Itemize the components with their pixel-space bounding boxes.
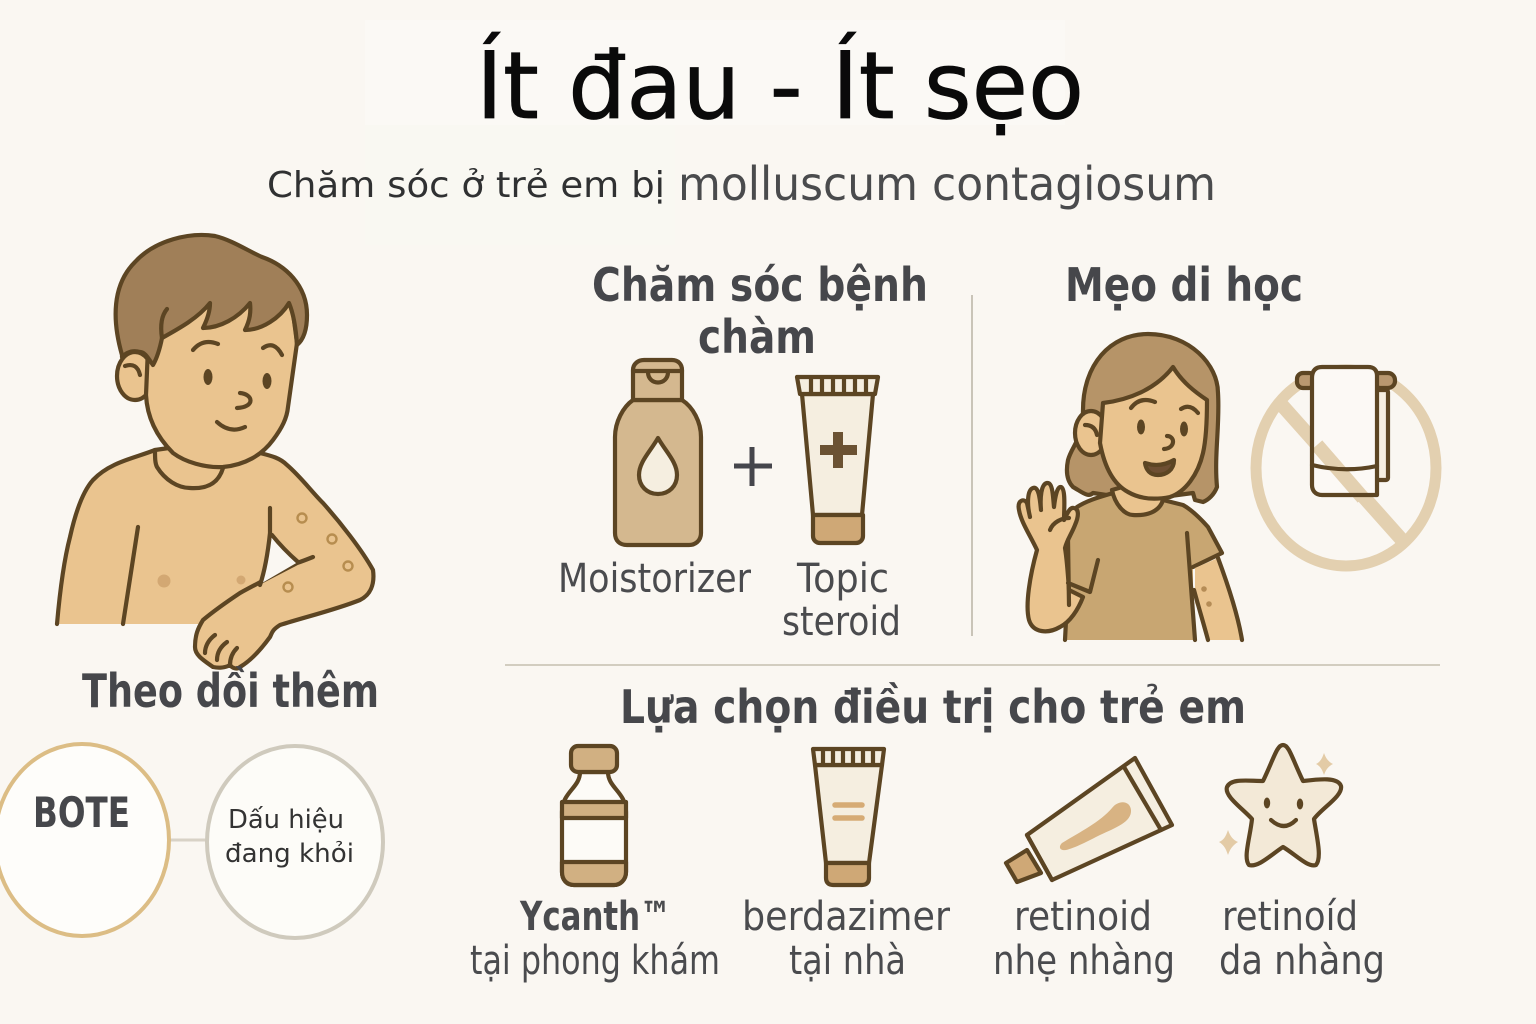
label: topical steroid: Topic [796, 556, 889, 602]
circle: BOTE [0, 744, 169, 936]
icon: Ycanth bottle [562, 746, 626, 885]
connector between circles [170, 838, 208, 842]
circle: signs of healing: Dấu hiệu [228, 805, 344, 835]
heading: school tips: Mẹo di học [1065, 258, 1303, 312]
heading: treatment options: Lựa chọn điều trị cho trẻ em [620, 680, 1246, 734]
label: Ycanth: tại phong khám [470, 938, 720, 984]
plus sign [734, 447, 772, 486]
icon: steroid tube [797, 377, 878, 543]
illustration: boy with bumps on arm [57, 235, 373, 668]
label: Ycanth [470, 894, 720, 984]
heading: eczema care: chàm [698, 310, 816, 364]
subtitle: molluscum contagiosum [678, 157, 1216, 211]
label: berdazimer: tại nhà [789, 938, 906, 984]
vertical divider [971, 295, 973, 636]
circle: signs of healing: đang khỏi [225, 839, 354, 869]
label: topical steroid: steroid [782, 599, 901, 645]
icon: berdazimer tube [813, 749, 884, 885]
label: mild retinoid: retinoíd [1222, 894, 1358, 940]
subtitle [267, 157, 1216, 211]
heading: follow up: Theo dồi thêm [82, 664, 379, 718]
icon: retinoid tube [1006, 758, 1172, 882]
icon: moisturizer bottle [615, 360, 701, 545]
horizontal divider [505, 664, 1440, 666]
heading: eczema care: Chăm sóc bệnh [592, 258, 928, 312]
label: gentle retinoid: retinoid [1014, 894, 1152, 940]
icon: no shared towel [1256, 367, 1436, 566]
label: mild retinoid [1219, 894, 1385, 984]
label: mild retinoid: da nhàng [1219, 938, 1385, 984]
icon: smiling star [1219, 745, 1341, 865]
illustration: girl waving [1019, 334, 1242, 640]
circle: signs of healing [207, 746, 383, 938]
label: berdazimer [742, 894, 950, 984]
title: Ít đau - Ít sẹo [476, 32, 1084, 140]
subtitle: Chăm sóc ở trẻ em bị [267, 165, 665, 206]
label: gentle retinoid: nhẹ nhàng [993, 938, 1175, 984]
label: Ycanth: Ycanth™ [519, 894, 671, 940]
label: topical steroid [782, 556, 901, 645]
label: gentle retinoid [993, 894, 1175, 984]
label: berdazimer: berdazimer [742, 894, 950, 940]
label: moisturizer: Moistorizer [558, 556, 751, 602]
circle: BOTE: BOTE [33, 788, 130, 837]
heading: eczema care [592, 258, 928, 364]
